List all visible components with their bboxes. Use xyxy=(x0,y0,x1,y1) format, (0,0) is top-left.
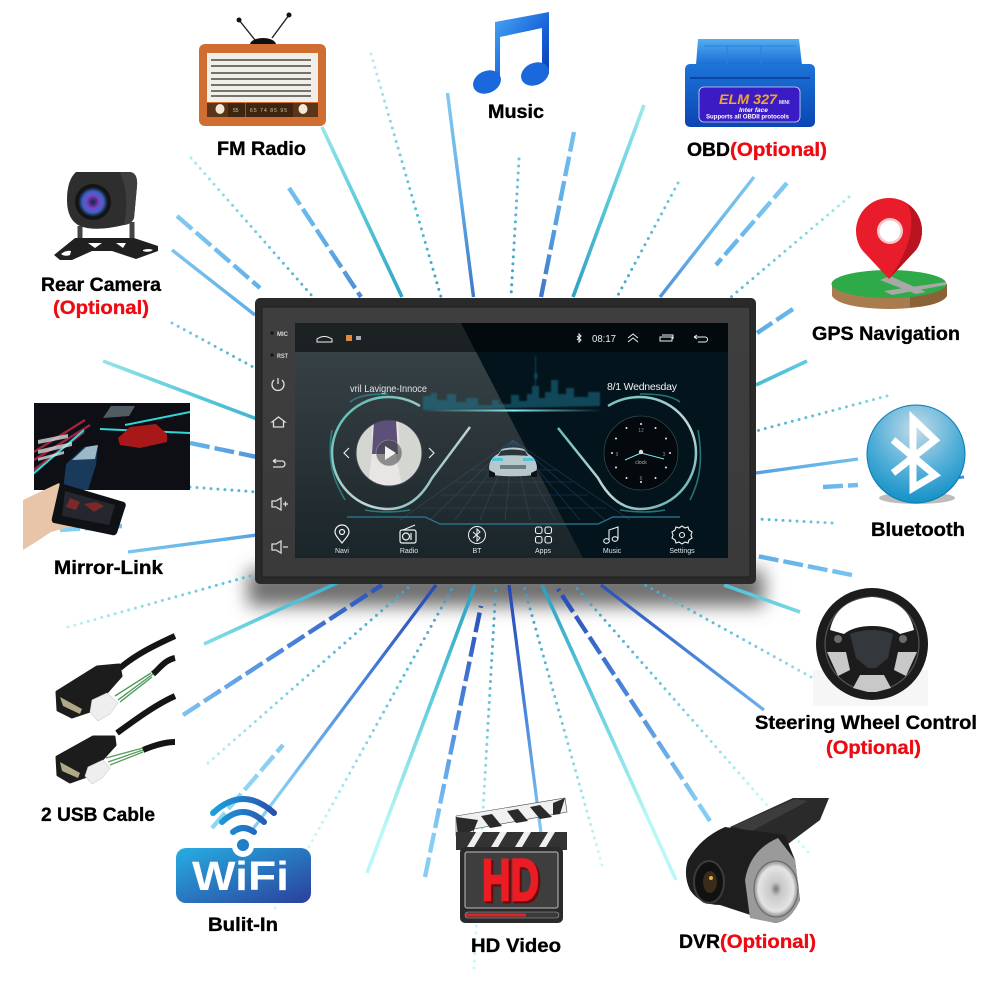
album ring xyxy=(356,420,422,486)
lens xyxy=(75,184,111,220)
pin hole xyxy=(877,218,903,244)
neon lines xyxy=(33,412,190,474)
mic hole and label xyxy=(270,331,288,338)
progress bar xyxy=(465,912,559,918)
screen image xyxy=(33,403,190,490)
label: music: Music xyxy=(488,101,544,123)
bluetooth status xyxy=(577,334,581,342)
track title: vril Lavigne-Innoce xyxy=(350,383,427,395)
icon: dvr camera xyxy=(686,798,829,923)
icon: fm radio xyxy=(199,12,326,126)
stray ray end xyxy=(954,477,964,478)
app: bt xyxy=(468,526,486,555)
diagonal glare xyxy=(295,323,583,558)
hd shadow: HD xyxy=(484,850,541,915)
unit frame xyxy=(255,298,756,584)
app: music: Music xyxy=(603,548,622,555)
right building xyxy=(103,406,135,418)
mount xyxy=(730,798,829,847)
perspective grid xyxy=(400,440,630,520)
unit face xyxy=(262,307,750,577)
hub pad xyxy=(850,630,893,668)
tuner strip xyxy=(207,103,318,117)
skyline glow line xyxy=(423,410,603,412)
label: dvr optional: DVR(Optional) xyxy=(679,931,816,953)
reset hole and label: RST xyxy=(277,353,288,360)
elm text: ELM 327 xyxy=(719,91,778,107)
rim highlight xyxy=(825,597,919,691)
cabinet xyxy=(199,44,326,126)
app: settings: Settings xyxy=(669,548,695,555)
lower port xyxy=(60,762,80,778)
ball xyxy=(867,405,965,503)
upper white connector xyxy=(90,693,118,721)
pin xyxy=(856,198,922,279)
app: apps xyxy=(535,527,552,555)
hand xyxy=(23,483,81,550)
play button xyxy=(376,440,402,466)
lower clapper xyxy=(456,832,567,850)
icon: fm radio: 55 xyxy=(233,108,239,114)
connector top xyxy=(696,39,802,65)
head unit drop shadow xyxy=(248,570,764,606)
car xyxy=(489,448,537,477)
icon: usb cables xyxy=(57,636,175,784)
app: music xyxy=(603,527,622,555)
silver arm xyxy=(745,838,800,923)
app: navi: Navi xyxy=(335,548,349,555)
dongle body xyxy=(685,64,815,127)
skyline xyxy=(423,356,600,410)
home outline xyxy=(317,336,332,342)
label: built-in: Bulit-In xyxy=(208,914,278,936)
clock text: 08:17 xyxy=(592,334,616,345)
red car xyxy=(118,424,167,448)
body xyxy=(686,827,800,923)
icon: volume down xyxy=(272,541,288,553)
analog clock: 9 xyxy=(616,452,619,458)
icon: gps navigation xyxy=(832,198,947,309)
label: mirror link: Mirror-Link xyxy=(54,557,163,579)
backing xyxy=(813,670,928,706)
interface text: Inter face xyxy=(739,107,768,114)
next arrow xyxy=(429,448,434,458)
notification icons xyxy=(346,335,361,341)
status bar xyxy=(295,323,728,352)
screen base xyxy=(461,323,728,558)
mini badge: MINI xyxy=(779,100,790,106)
base side xyxy=(832,284,947,309)
back arrow xyxy=(694,335,708,342)
analog clock: 6 xyxy=(640,476,643,482)
icon: back xyxy=(273,459,285,467)
album cover xyxy=(356,420,422,486)
label: hd video: HD Video xyxy=(471,935,561,957)
left building xyxy=(38,434,72,461)
hd text: HD xyxy=(482,848,539,913)
date: 8/1 Wednesday xyxy=(607,381,678,393)
head unit xyxy=(255,298,756,584)
lower wires xyxy=(106,748,143,765)
label: bluetooth: Bluetooth xyxy=(871,519,965,541)
lower white connector xyxy=(85,760,110,784)
icon: music note xyxy=(469,12,553,98)
label: usb cable: 2 USB Cable xyxy=(41,804,155,826)
label: obd optional: OBD(Optional) xyxy=(687,139,827,161)
icon: hd clapperboard xyxy=(456,798,567,923)
upper plug xyxy=(57,665,121,717)
wifi box xyxy=(176,848,311,903)
lower cable two xyxy=(143,742,175,750)
upper wires xyxy=(115,673,153,702)
wheel disc xyxy=(816,588,928,700)
protocol text: Supports all OBDII protocols xyxy=(706,114,790,120)
label: fm radio: FM Radio xyxy=(217,138,306,160)
wifi arcs xyxy=(213,799,274,832)
icon: volume up xyxy=(272,498,288,510)
upper cable two xyxy=(153,658,175,674)
mic hole and label: MIC xyxy=(277,331,288,338)
buttons xyxy=(834,635,907,643)
icon: obd dongle xyxy=(685,39,815,127)
screen area xyxy=(465,852,558,908)
upper cable xyxy=(120,636,175,668)
upper port xyxy=(60,697,82,714)
icon: fm radio: 65 74 85 95 xyxy=(250,108,287,114)
app: settings xyxy=(669,526,695,555)
dock curve xyxy=(347,517,680,524)
roads xyxy=(880,276,946,295)
road glow xyxy=(34,420,90,470)
icon: power xyxy=(272,378,284,390)
label: gps navigation: GPS Navigation xyxy=(812,323,960,345)
screen xyxy=(295,323,728,558)
album hair xyxy=(372,420,398,454)
pin shade xyxy=(889,204,922,279)
blue car xyxy=(63,445,98,490)
side controls xyxy=(270,331,288,553)
bracket xyxy=(54,238,158,260)
upper clapper xyxy=(456,798,567,836)
chevrons xyxy=(628,334,638,342)
recents xyxy=(660,335,673,341)
status icons xyxy=(317,334,708,345)
lens xyxy=(694,861,724,903)
wifi dot xyxy=(237,839,249,851)
wifi text: WiFi xyxy=(192,853,289,899)
reset hole and label xyxy=(270,353,288,360)
previous arrow xyxy=(344,448,349,458)
app: apps: Apps xyxy=(535,548,551,555)
antenna xyxy=(239,15,289,40)
icon: home xyxy=(272,417,285,427)
icon: wifi xyxy=(176,799,311,903)
label: steering optional: (Optional) xyxy=(826,737,921,759)
app: radio: Radio xyxy=(400,548,418,555)
speaker panel xyxy=(207,53,318,102)
housing xyxy=(67,172,137,229)
silver trim xyxy=(827,652,917,692)
radiating rays xyxy=(60,54,887,968)
board xyxy=(460,847,563,923)
icon: bluetooth xyxy=(867,405,965,504)
analog clock: clock xyxy=(635,460,647,466)
phone xyxy=(52,483,126,535)
infinity ring right xyxy=(558,397,696,509)
bracket holes xyxy=(61,243,153,256)
app: navi xyxy=(335,525,349,555)
rune xyxy=(893,419,935,488)
window xyxy=(830,597,914,634)
app: radio xyxy=(400,525,418,555)
analog clock xyxy=(604,416,678,490)
icon: mirror link xyxy=(23,403,190,550)
lower cable xyxy=(117,696,175,733)
speaker lines xyxy=(211,60,311,96)
sticker xyxy=(699,87,800,122)
label: rear camera: Rear Camera xyxy=(41,274,161,296)
infinity ring left xyxy=(332,397,470,509)
analog clock: 12 xyxy=(638,428,644,434)
ball shadow xyxy=(879,492,955,504)
lower plug xyxy=(57,737,115,782)
album figure xyxy=(368,420,402,486)
base top xyxy=(832,270,946,298)
icon: steering wheel xyxy=(813,588,928,706)
notch xyxy=(232,835,254,857)
icon: rear camera xyxy=(54,172,158,260)
silver disc xyxy=(754,861,798,917)
label: steering wheel control: Steering Wheel Control xyxy=(755,712,977,734)
outer accent arcs xyxy=(330,394,700,512)
posts xyxy=(80,222,132,242)
analog clock: 3 xyxy=(663,452,666,458)
app: bt: BT xyxy=(473,548,482,555)
label: rear camera optional: (Optional) xyxy=(53,297,149,319)
